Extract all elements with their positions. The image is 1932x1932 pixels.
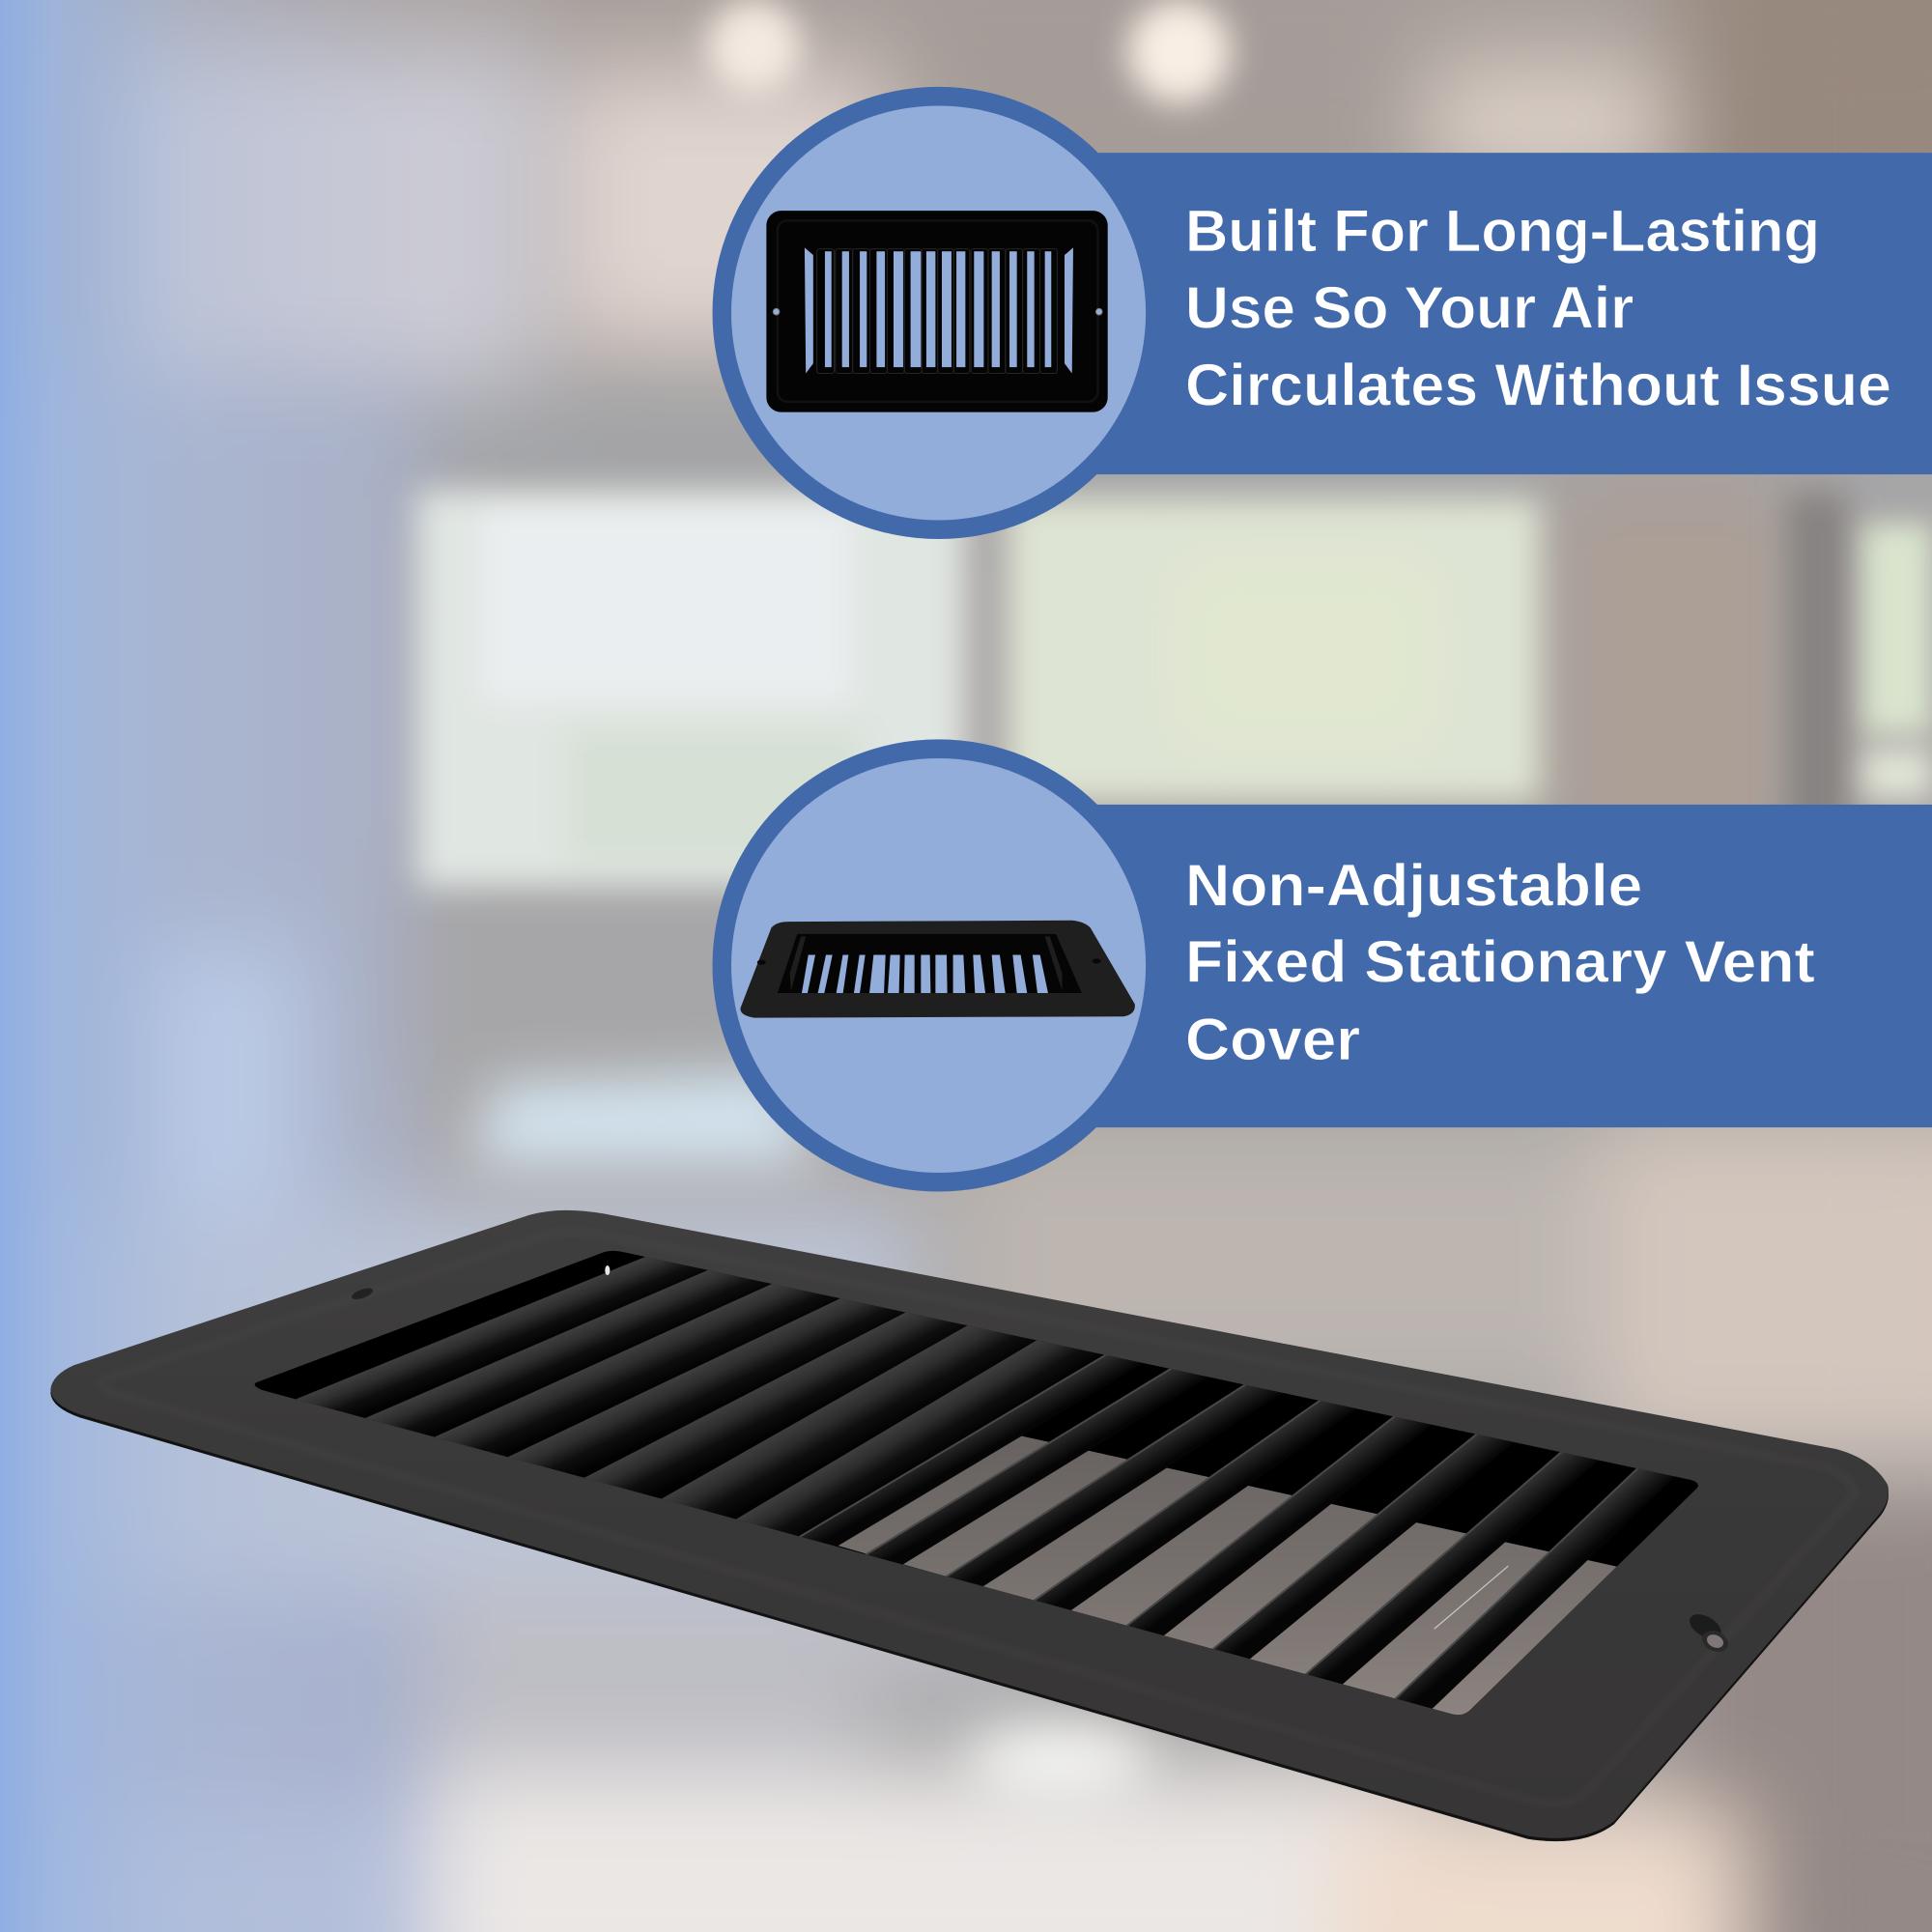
band 2 — [936, 805, 1932, 1127]
right screw hole — [1686, 1609, 1732, 1656]
louver edge highlights — [796, 1351, 1641, 1704]
left screw dimple — [351, 1286, 374, 1301]
floor seen through the louvers — [838, 1435, 1617, 1716]
callout 2 text — [1185, 852, 1815, 1072]
opening interior — [246, 1244, 1713, 1725]
callout 1 text: Circulates Without Issue — [1185, 353, 1891, 418]
circle ring 1 — [713, 87, 1165, 539]
circle fill 2 — [731, 758, 1146, 1173]
frame bevel ridge — [99, 1232, 1856, 1804]
callout 2 text: Non-Adjustable — [1185, 853, 1642, 919]
vent dark underside rim — [50, 1213, 1889, 1841]
circle fill 1 — [731, 105, 1146, 521]
glint — [1435, 1566, 1508, 1629]
callout 2 text: Fixed Stationary Vent — [1185, 929, 1815, 995]
circle ring 2 — [713, 739, 1165, 1192]
callout 2 text: Cover — [1185, 1007, 1360, 1072]
narrow louvers — [796, 1351, 1678, 1714]
top-down vent thumbnail — [766, 211, 1108, 412]
wide louvers — [295, 1253, 1112, 1539]
callout 1: built for long-lasting use — [713, 87, 1932, 539]
callout 2: non-adjustable fixed vent — [713, 739, 1932, 1192]
band 1 — [936, 153, 1932, 474]
callout 1 text: Built For Long-Lasting — [1185, 198, 1820, 264]
callout 1 text — [1185, 198, 1891, 418]
callout 1 text: Use So Your Air — [1185, 274, 1634, 340]
main floor vent product photo — [50, 1210, 1889, 1841]
vent frame — [50, 1210, 1889, 1838]
angled vent thumbnail — [740, 921, 1135, 1018]
